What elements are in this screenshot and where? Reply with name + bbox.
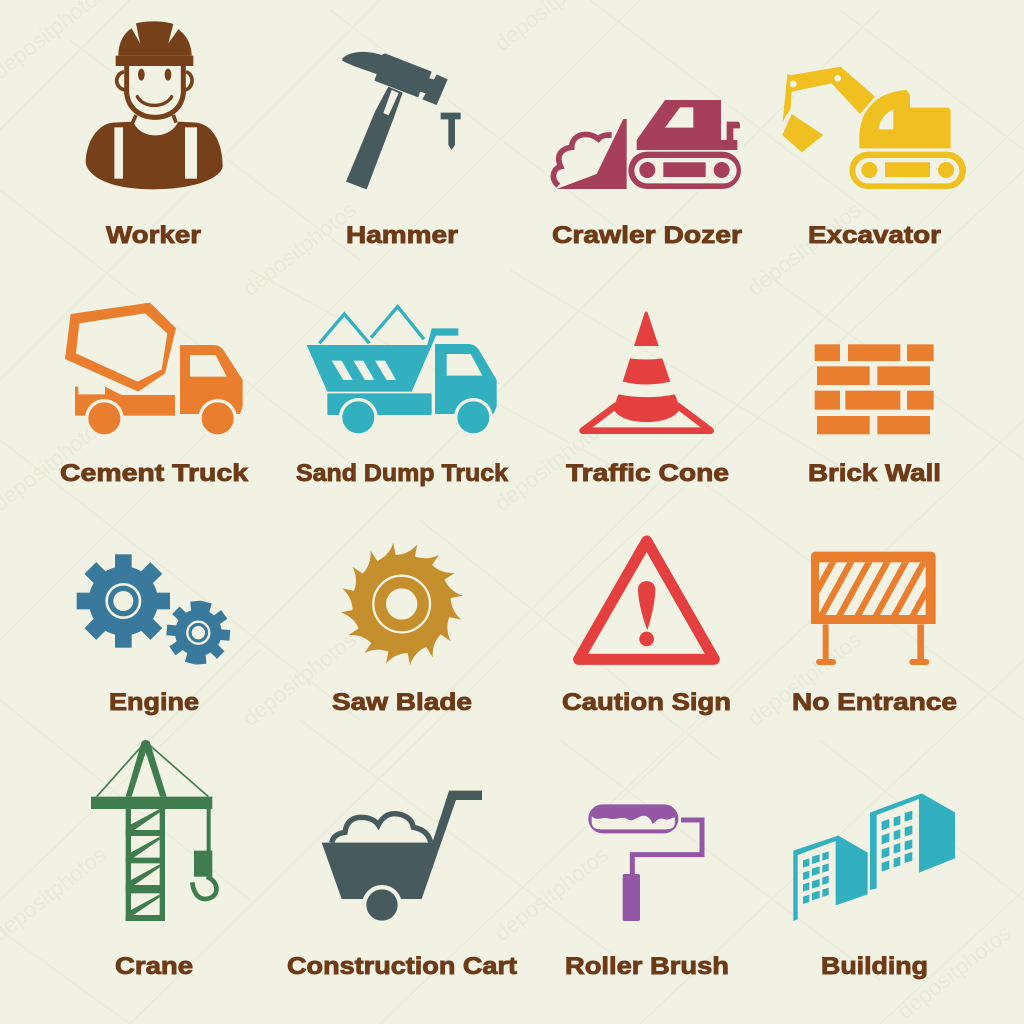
label: Saw Blade: Saw Blade <box>332 689 472 716</box>
watermark text: depositphotos <box>490 412 613 516</box>
icon: buildings <box>793 793 955 921</box>
panel: traffic cone <box>566 311 729 487</box>
panel: saw blade <box>332 540 472 716</box>
icon: traffic cone <box>583 311 711 431</box>
icon: caution triangle <box>579 541 714 659</box>
panel: crawler dozer <box>552 100 742 249</box>
panel: building <box>793 793 955 980</box>
panel: sand dump truck <box>296 307 509 487</box>
panel: caution sign <box>562 541 731 716</box>
panel: excavator <box>782 67 966 249</box>
icon: crawler dozer <box>553 100 741 189</box>
icon: hammer <box>342 52 461 189</box>
label: No Entrance: No Entrance <box>792 689 957 716</box>
label: Sand Dump Truck: Sand Dump Truck <box>296 460 509 487</box>
label: Crane: Crane <box>115 953 193 980</box>
watermark text: depositphotos <box>743 627 866 731</box>
label: Traffic Cone: Traffic Cone <box>566 460 729 487</box>
panel: engine <box>77 554 230 716</box>
icon: brick wall <box>815 344 934 434</box>
icon: excavator <box>782 67 966 189</box>
label: Caution Sign: Caution Sign <box>562 689 731 716</box>
label: Roller Brush: Roller Brush <box>565 953 729 980</box>
icon: paint roller <box>588 804 702 921</box>
label: Crawler Dozer: Crawler Dozer <box>552 222 742 249</box>
panel: brick wall <box>808 344 941 487</box>
label: Worker: Worker <box>106 222 201 249</box>
label: Construction Cart: Construction Cart <box>287 953 517 980</box>
panel: construction cart <box>287 791 517 980</box>
icon: wheelbarrow <box>322 791 482 925</box>
icon: tower crane <box>91 740 216 921</box>
watermark text: depositphotos <box>893 920 1016 1024</box>
panel: no entrance <box>792 552 957 716</box>
label: Hammer: Hammer <box>346 222 458 249</box>
panel: crane <box>91 740 216 980</box>
label: Building: Building <box>821 953 928 980</box>
panel: hammer <box>342 52 461 249</box>
watermark text: depositphotos <box>238 627 361 731</box>
label: Excavator: Excavator <box>808 222 941 249</box>
icon: saw blade <box>337 540 466 668</box>
label: Brick Wall: Brick Wall <box>808 460 941 487</box>
watermark text: depositphotos <box>490 842 613 946</box>
icon: worker <box>86 21 223 189</box>
watermark text: depositphotos <box>743 197 866 301</box>
panel: roller brush <box>565 804 729 980</box>
watermark text: depositphotos <box>238 197 361 301</box>
panel: worker <box>86 21 223 249</box>
icon: barrier <box>810 552 936 665</box>
panel: cement truck <box>60 303 249 487</box>
icon: cement truck <box>65 303 243 438</box>
icon: gears <box>77 554 230 665</box>
label: Engine: Engine <box>109 689 199 716</box>
icon: sand dump truck <box>307 307 497 437</box>
label: Cement Truck: Cement Truck <box>60 460 249 487</box>
